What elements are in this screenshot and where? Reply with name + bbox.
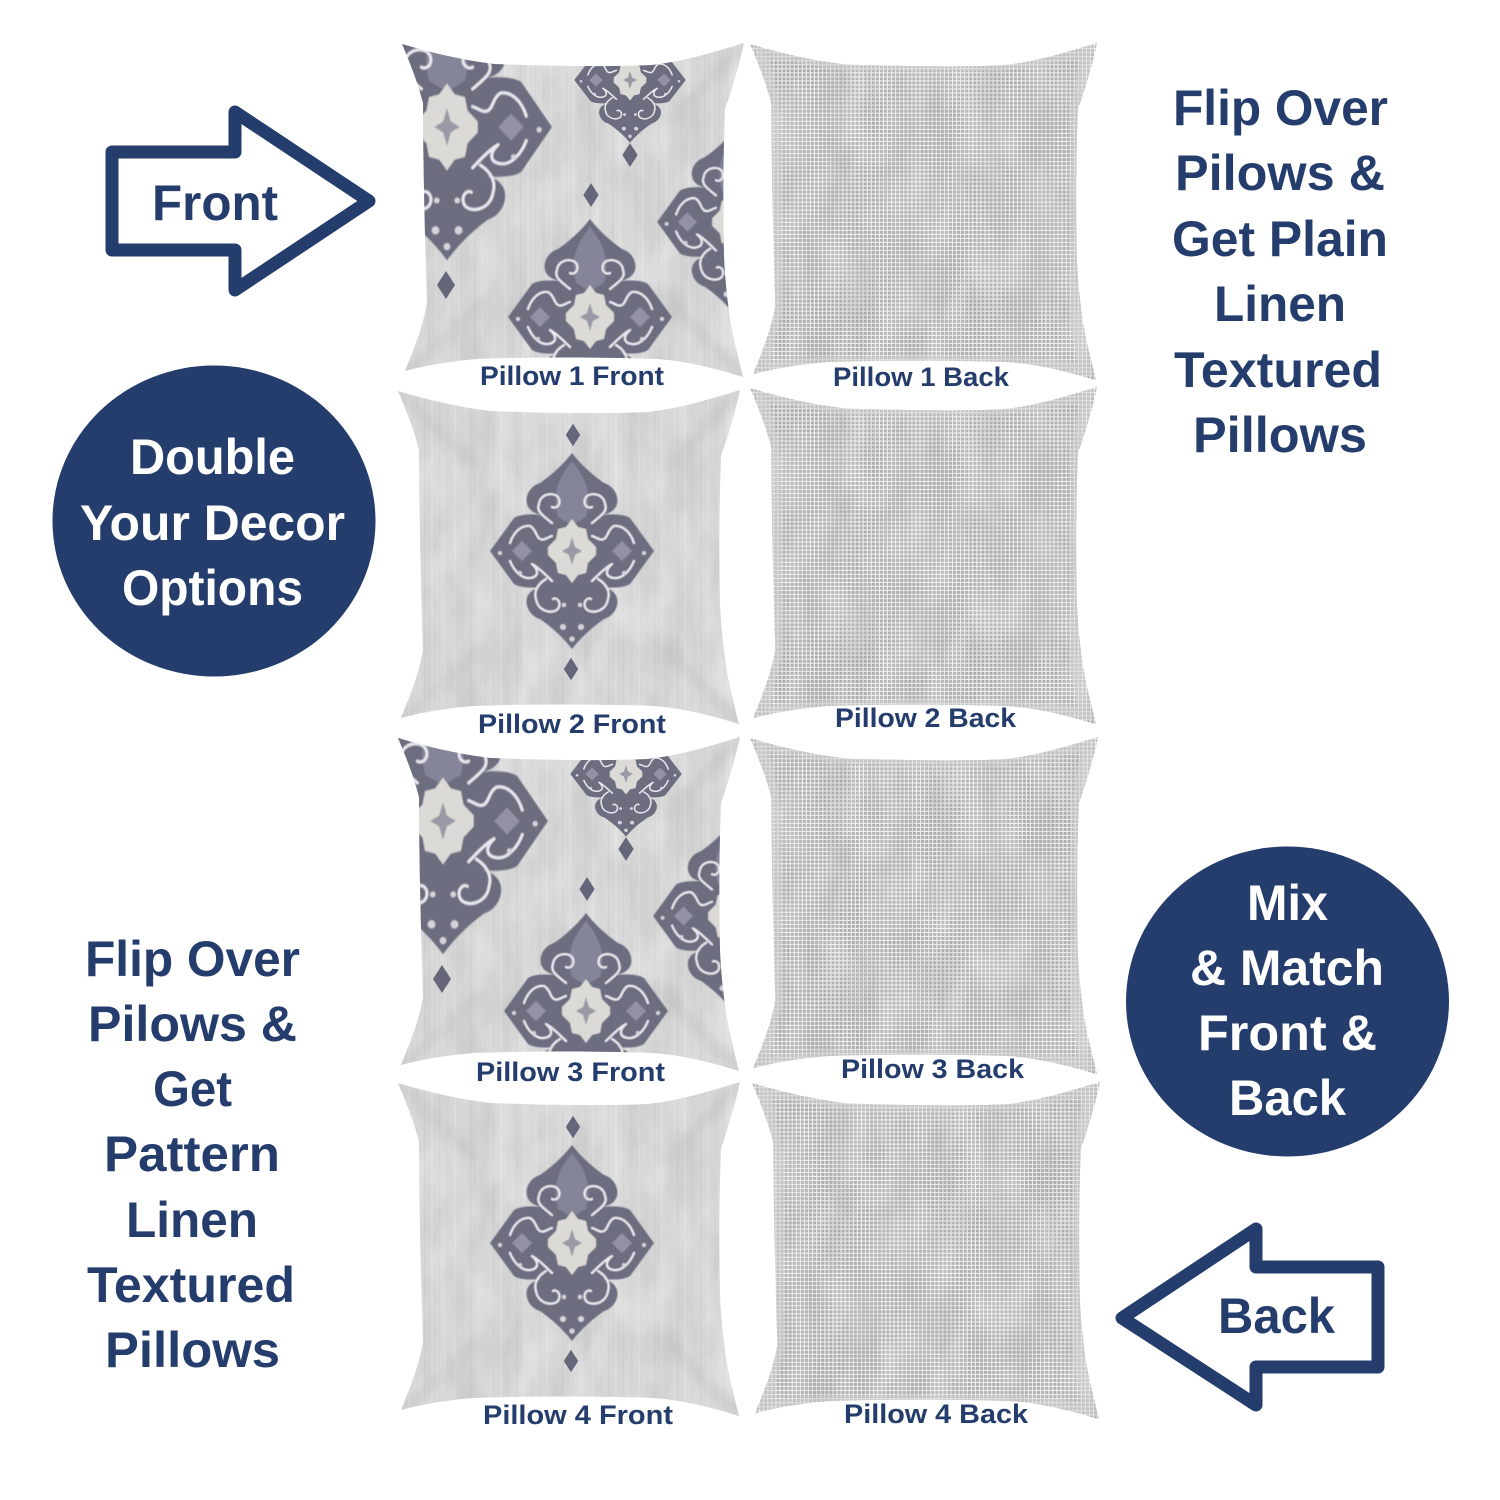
pillow 4 front (398, 1080, 743, 1420)
label: pillow 4 front: Pillow 4 Front (483, 1400, 673, 1430)
badge: double your decor options: Double (130, 429, 295, 485)
pillow 2 front (398, 388, 743, 728)
label: pillow 3 back: Pillow 3 Back (841, 1054, 1025, 1084)
arrow: back: Back (1218, 1288, 1335, 1344)
text block: flip over pillows, pattern linen: Pilows & (88, 996, 297, 1052)
pillow 3 back (750, 735, 1101, 1078)
label: pillow 3 front: Pillow 3 Front (476, 1057, 665, 1087)
badge: mix and match front and back: Back (1229, 1070, 1346, 1126)
pillow 4 back (752, 1080, 1103, 1423)
text block: flip over pillows, plain linen: Flip Over (1173, 80, 1388, 136)
arrow: front (112, 112, 369, 290)
badge: mix and match front and back: Mix (1247, 875, 1328, 931)
arrow: back (1122, 1229, 1378, 1405)
text block: flip over pillows, plain linen: Get Plain (1172, 211, 1388, 267)
text block: flip over pillows, pattern linen: Get (153, 1061, 232, 1117)
text block: flip over pillows, plain linen (1172, 80, 1388, 463)
pillow 3 front (338, 688, 809, 1109)
text block: flip over pillows, plain linen: Textured (1174, 342, 1382, 398)
badge: double your decor options (52, 366, 376, 676)
text block: flip over pillows, pattern linen: Pattern (104, 1126, 280, 1182)
badge: mix and match front and back: Front & (1198, 1005, 1377, 1061)
label: pillow 1 front: Pillow 1 Front (480, 361, 664, 391)
text block: flip over pillows, pattern linen (85, 931, 300, 1378)
pillow 1 back (750, 41, 1100, 384)
arrow: front: Front (152, 175, 278, 231)
badge: double your decor options: Your Decor (80, 495, 345, 551)
label: pillow 4 back: Pillow 4 Back (844, 1399, 1029, 1429)
label: pillow 1 back: Pillow 1 Back (833, 362, 1010, 392)
text block: flip over pillows, plain linen: Pillows (1193, 407, 1367, 463)
badge: mix and match front and back (1126, 846, 1449, 1156)
pillow 2 back (750, 385, 1100, 728)
text block: flip over pillows, pattern linen: Textured (87, 1257, 295, 1313)
text block: flip over pillows, pattern linen: Linen (126, 1192, 258, 1248)
text block: flip over pillows, pattern linen: Pillows (105, 1322, 280, 1378)
text block: flip over pillows, plain linen: Pilows & (1175, 145, 1385, 201)
badge: double your decor options: Options (122, 560, 303, 616)
label: pillow 2 back: Pillow 2 Back (835, 703, 1017, 733)
text block: flip over pillows, pattern linen: Flip Over (85, 931, 300, 987)
text block: flip over pillows, plain linen: Linen (1214, 276, 1346, 332)
pillow 1 front (342, 0, 813, 415)
label: pillow 2 front: Pillow 2 Front (478, 709, 666, 739)
badge: mix and match front and back: & Match (1190, 940, 1384, 996)
